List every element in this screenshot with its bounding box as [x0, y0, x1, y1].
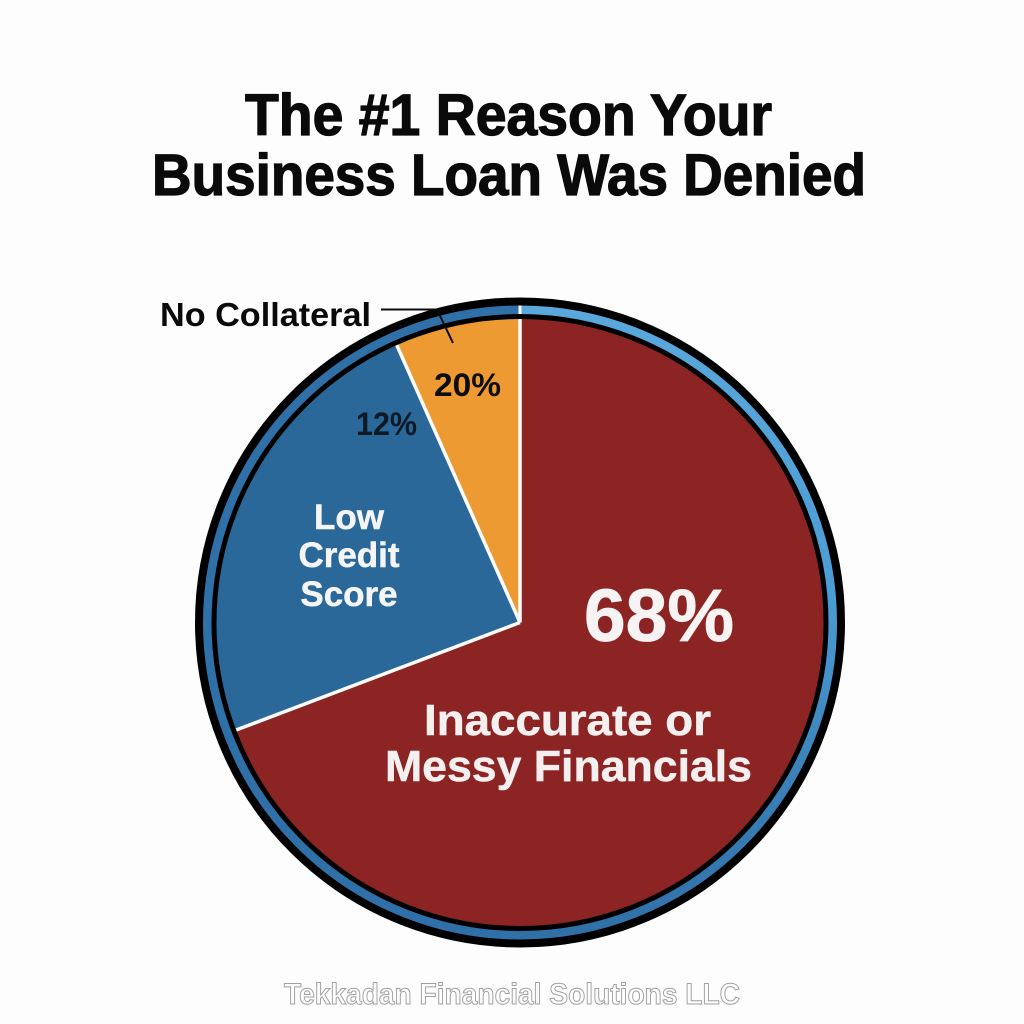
label: low credit score — [298, 498, 400, 614]
label: low credit score: Credit — [298, 536, 400, 575]
label: low credit score: Low — [314, 498, 385, 537]
value: 68%: 68% — [584, 574, 734, 657]
title: The #1 Reason Your — [245, 83, 772, 148]
label: inaccurate or messy financials: Inaccurate or — [424, 696, 711, 745]
leader line: no collateral — [381, 310, 453, 343]
ring: inner black border — [214, 316, 826, 928]
title — [152, 83, 866, 208]
label: inaccurate or messy financials: Messy Financials — [385, 742, 752, 791]
slice: inaccurate or messy financials 68% — [235, 318, 825, 928]
ring: right half light blue — [520, 310, 832, 935]
footer watermark: Tekkadan Financial Solutions LLC — [284, 978, 740, 1011]
label: no collateral: No Collateral — [160, 296, 371, 333]
ring: left half dark blue — [208, 310, 520, 935]
pie chart — [199, 302, 841, 944]
title: Business Loan Was Denied — [152, 143, 866, 208]
value: 20%: 20% — [434, 367, 501, 403]
slice: low credit score — [215, 344, 520, 730]
slice dividers — [235, 312, 520, 730]
ring: outer black border — [199, 302, 841, 944]
ring: white tick at top — [518, 305, 522, 316]
label: low credit score: Score — [300, 575, 398, 614]
label: inaccurate or messy financials — [385, 696, 752, 791]
value: 12%: 12% — [356, 406, 417, 442]
slice: no collateral — [396, 318, 520, 622]
